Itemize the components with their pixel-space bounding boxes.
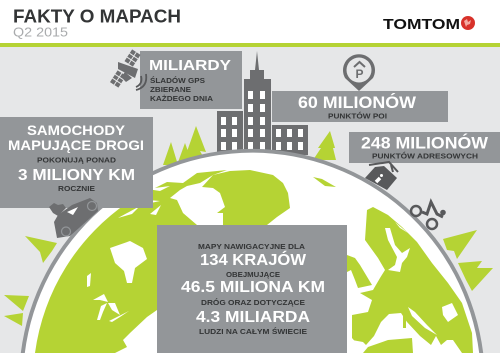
- panel: mapping cars stat: POKONUJĄ PONAD: [37, 156, 117, 164]
- panel: satellite stat: MILIARDY: [149, 57, 231, 74]
- panel: mapping cars stat: 3 MILIONY KM: [18, 167, 135, 184]
- icon: POI pin: P: [356, 67, 364, 81]
- panel: global coverage stat: 134 KRAJÓW: [200, 251, 306, 269]
- icon: trees on the left edge: [4, 236, 57, 326]
- icon: cyclist: [411, 202, 446, 229]
- panel: satellite stat: KAŻDEGO DNIA: [150, 94, 214, 103]
- panel: global coverage stat: [157, 225, 347, 353]
- panel: satellite stat: ŚLADÓW GPS: [150, 76, 205, 85]
- panel: satellite stat: ZBIERANE: [150, 85, 191, 94]
- map: Europe: [313, 177, 473, 353]
- panel: global coverage stat: DRÓG ORAZ DOTYCZĄCE: [201, 298, 305, 307]
- panel: POI stat: PUNKTÓW POI: [328, 112, 387, 120]
- map: Mediterranean islands: [403, 315, 406, 328]
- panel: mapping cars stat: [0, 117, 153, 208]
- globe: [21, 149, 483, 353]
- map: North Africa: [363, 338, 413, 353]
- panel: mapping cars stat: SAMOCHODY: [27, 122, 126, 138]
- panel: addresses stat: PUNKTÓW ADRESOWYCH: [372, 152, 478, 160]
- panel: POI stat: 60 MILIONÓW: [298, 93, 417, 112]
- icon: tree right of the city: [313, 131, 336, 160]
- icon: mapping car: [49, 198, 98, 238]
- icon: skyscrapers: [217, 51, 308, 156]
- panel: addresses stat: [349, 132, 500, 163]
- panel: global coverage stat: MAPY NAWIGACYJNE DLA: [198, 242, 306, 251]
- subtitle: quarter: Q2 2015: [13, 26, 68, 40]
- panel: mapping cars stat: ROCZNIE: [58, 184, 95, 193]
- panel: mapping cars stat: MAPUJĄCE DROGI: [8, 137, 144, 153]
- panel: global coverage stat: OBEJMUJĄCE: [226, 270, 280, 279]
- title: FAKTY O MAPACH: [13, 7, 181, 27]
- logo: TomTom: TOMTOM: [383, 16, 460, 33]
- green header rule: [0, 43, 500, 47]
- icon: satellite: [110, 49, 146, 90]
- panel: global coverage stat: LUDZI NA CAŁYM ŚWIECIE: [199, 327, 307, 336]
- panel: satellite stat: [140, 51, 242, 109]
- icon: POI pin: [343, 54, 375, 91]
- icon: house: [365, 162, 398, 190]
- icon: trees on the right edge: [443, 230, 493, 291]
- panel: global coverage stat: 46.5 MILIONA KM: [181, 279, 325, 296]
- map: Greenland: [202, 170, 290, 225]
- icon: trees left of the city: [163, 126, 206, 165]
- panel: addresses stat: 248 MILIONÓW: [361, 134, 488, 152]
- panel: global coverage stat: 4.3 MILIARDA: [196, 309, 310, 326]
- map: North America: [35, 170, 227, 353]
- panel: POI stat: [272, 91, 448, 122]
